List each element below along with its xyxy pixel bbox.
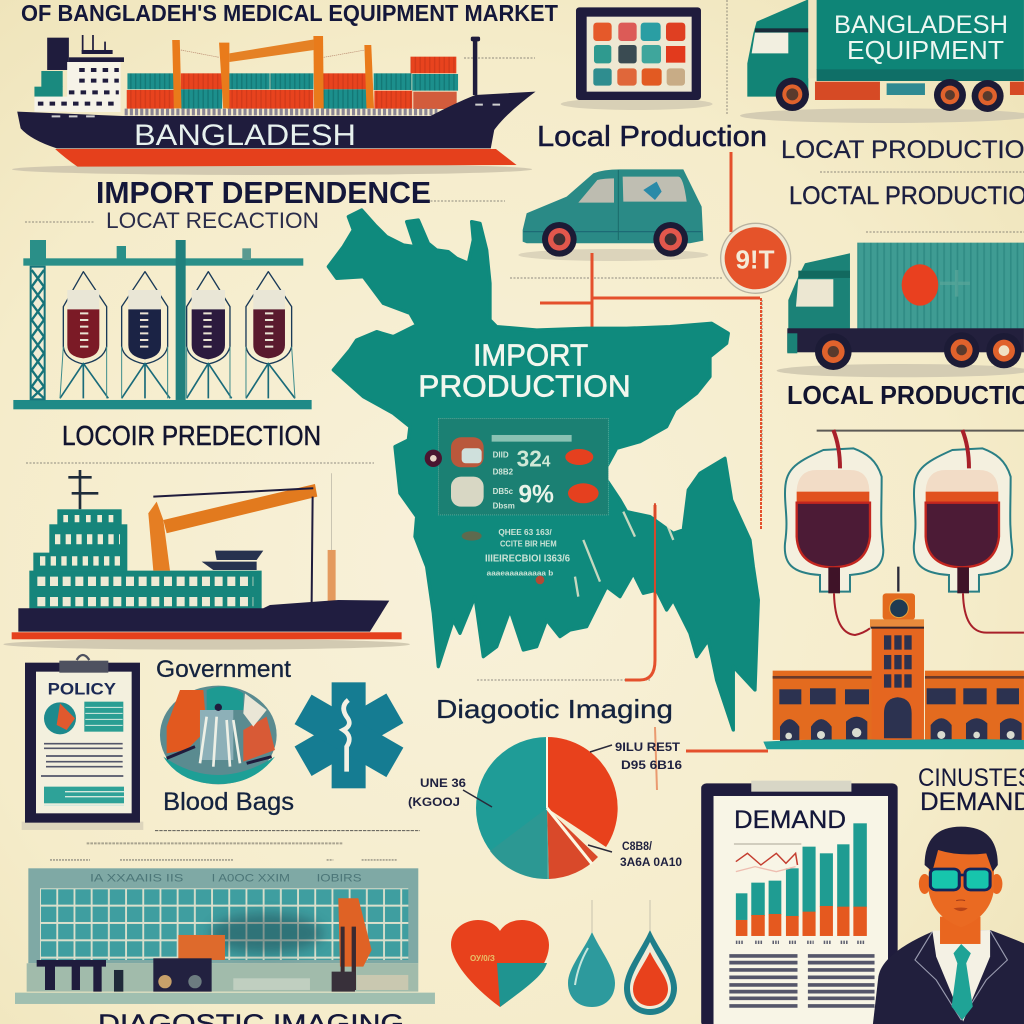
dotted guide lines xyxy=(25,0,1024,680)
badge: red circle xyxy=(721,223,791,293)
heading: local reduction: LOCAT RECACTION xyxy=(106,208,319,233)
panel: demand clipboard xyxy=(701,781,898,1024)
icon: heart: ОУ/0/З xyxy=(470,954,495,963)
icon: heart xyxy=(451,920,549,1007)
mast xyxy=(473,38,477,95)
illustration: rack of blood vessels xyxy=(13,240,312,409)
illustration: truck Bangladesh equipment: BANGLADESH xyxy=(834,11,1008,39)
map stats panel: 324 xyxy=(517,446,551,472)
panel: diagnostic imaging facility: IOBIRS xyxy=(317,873,362,885)
text stripes xyxy=(729,956,875,1006)
label: locoir prediction: LOCOIR PREDECTION xyxy=(62,420,321,451)
map stats panel: DB5c xyxy=(493,487,514,496)
illustration: teal van xyxy=(518,169,708,261)
bars xyxy=(736,823,867,920)
icon: star of life xyxy=(295,682,403,788)
icon: red drop xyxy=(624,900,677,1015)
map stats panel: DIID xyxy=(493,451,509,460)
heading: import dependence: IMPORT DEPENDENCE xyxy=(96,175,431,210)
heading: local production: Local Production xyxy=(537,121,767,153)
blood bag 2 xyxy=(914,430,1024,633)
panel: demand clipboard: DEMAND xyxy=(734,806,846,834)
panel: diagnostic imaging facility: I A0OC XXIM xyxy=(212,873,290,885)
pie labels xyxy=(408,740,682,869)
title: OF BANGLADEH'S MEDICAL EQUIPMENT MARKET xyxy=(21,0,558,26)
map small notes: IIIEIRECBIOI I363/6 xyxy=(485,554,570,565)
label: clusters demand xyxy=(918,764,1024,816)
blood bag 1 xyxy=(785,430,883,635)
label: government: Government xyxy=(156,656,291,683)
pie labels: UNE 36 xyxy=(420,776,466,790)
illustration: hospital ship with crane xyxy=(3,470,410,650)
map stats panel xyxy=(425,418,608,515)
illustration: truck Bangladesh equipment xyxy=(740,0,1024,123)
panel: policy clipboard xyxy=(22,655,143,830)
illustration: truck with flag container xyxy=(777,243,1024,377)
illustration: hospital building xyxy=(763,567,1024,749)
map small notes: CCITE BIR HEM xyxy=(500,539,557,549)
map stats panel: 9% xyxy=(518,482,554,509)
figure: person in suit xyxy=(873,827,1024,1024)
map: Bangladesh xyxy=(328,210,758,730)
panel: diagnostic imaging facility xyxy=(15,831,435,1004)
cranes xyxy=(172,40,181,108)
map label: IMPORT xyxy=(473,339,588,373)
map small notes xyxy=(462,527,570,584)
label: blood bags: Blood Bags xyxy=(163,788,294,816)
vessels xyxy=(60,272,295,398)
label: diagnostic imaging: Diagootic Imaging xyxy=(436,694,673,724)
connector lines: red network xyxy=(540,152,768,790)
pie labels: 3A6A 0A10 xyxy=(620,855,682,869)
illustration: blood bags xyxy=(785,430,1024,635)
map: Bangladesh: PRODUCTION xyxy=(418,370,631,404)
map stats panel: D8B2 xyxy=(493,467,514,476)
map small notes: QHEE 63 163/ xyxy=(498,527,552,537)
icon: tablet xyxy=(561,7,713,110)
badge: red circle: 9!T xyxy=(735,244,775,274)
pie labels: (KGOOJ xyxy=(408,795,460,809)
hull xyxy=(17,92,536,148)
chart: pie xyxy=(408,737,682,879)
panel: policy clipboard: POLICY xyxy=(48,680,116,699)
map small notes: aaaeaaaaaaaaa b xyxy=(487,569,554,578)
pie labels: D95 6B16 xyxy=(621,758,682,772)
illustration: cargo ship Bangladesh xyxy=(12,35,536,175)
pie labels: C8B8/ xyxy=(622,839,653,853)
icon: teal drop xyxy=(568,900,615,1007)
illustration: truck Bangladesh equipment: EQUIPMENT xyxy=(847,35,1004,65)
containers xyxy=(127,73,174,89)
panel: diagnostic imaging facility: IA XXAAIIS IIS xyxy=(90,873,183,885)
crane xyxy=(148,502,170,571)
deck cargo strip xyxy=(125,102,437,122)
map stats panel: Dbsm xyxy=(493,502,515,511)
pie labels: 9ILU RE5T xyxy=(615,740,681,754)
icon: medical equipment pile xyxy=(160,686,277,784)
illustration: cargo ship Bangladesh: BANGLADESH xyxy=(134,119,356,152)
